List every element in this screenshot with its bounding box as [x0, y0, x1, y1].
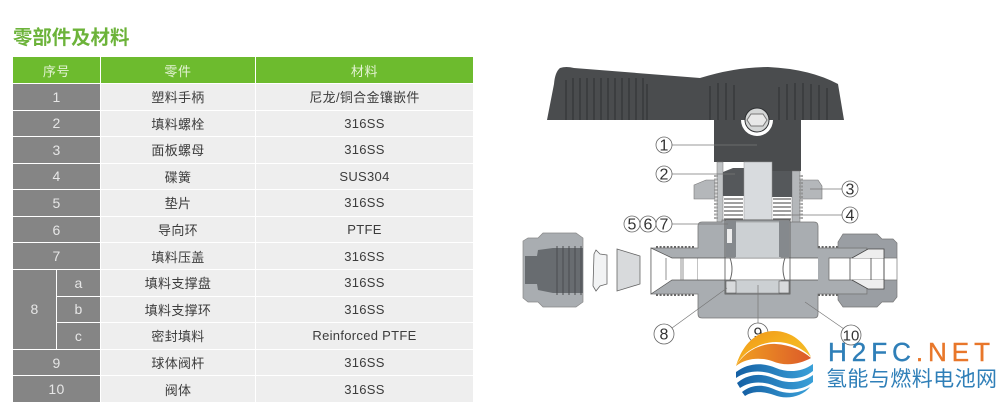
row 8a — [57, 270, 473, 296]
callout leader lines — [672, 145, 844, 329]
row 10: 316SS — [344, 382, 385, 397]
row 8 group number: 8 — [30, 301, 39, 317]
callout 3 — [842, 181, 858, 198]
row 9: 9 — [52, 355, 61, 371]
callout 2 — [656, 166, 672, 184]
row 7: 316SS — [344, 249, 385, 264]
row 8b: b — [74, 301, 83, 317]
front ferrule — [617, 249, 640, 291]
row 1: 塑料手柄 — [151, 90, 205, 105]
row 10: 10 — [48, 381, 65, 397]
callout 6: 6 — [644, 216, 653, 234]
row 3: 3 — [52, 142, 61, 158]
logo text: H2FC.NET: H2FC.NET — [828, 337, 990, 367]
valve body — [651, 220, 867, 318]
row 8c: Reinforced PTFE — [312, 328, 417, 343]
callout 6 — [640, 216, 656, 234]
row 4: SUS304 — [339, 169, 390, 184]
row 8c: 密封填料 — [151, 329, 205, 344]
callout 9 — [748, 323, 768, 343]
row 3 — [13, 137, 473, 163]
table header row: 零件 — [164, 64, 192, 79]
row 8c: c — [75, 328, 82, 344]
row 2: 填料螺栓 — [151, 117, 205, 132]
title: 零部件及材料 — [13, 27, 129, 49]
row 5: 316SS — [344, 195, 385, 210]
row 5: 垫片 — [165, 196, 191, 211]
row 8b — [57, 297, 473, 322]
row 8 group number — [13, 270, 56, 349]
bonnet, nuts and stem — [694, 162, 822, 222]
row 8b: 填料支撑环 — [145, 303, 211, 318]
row 8a: a — [74, 275, 83, 291]
row 8a: 316SS — [344, 275, 385, 290]
callout 1: 1 — [660, 138, 669, 154]
callout 4 — [842, 207, 858, 224]
callout 1 — [656, 137, 672, 154]
row 2 — [13, 111, 473, 136]
callout 5: 5 — [628, 216, 637, 234]
table header row — [13, 57, 473, 83]
row 1 — [13, 84, 473, 110]
callout 7 — [656, 216, 672, 234]
row 8a: 填料支撑盘 — [145, 276, 211, 291]
row 6: PTFE — [347, 222, 382, 237]
callout 3: 3 — [846, 182, 855, 198]
row 9: 球体阀杆 — [151, 356, 205, 371]
table: parts and materials — [13, 57, 473, 402]
row 7 — [13, 243, 473, 269]
row 1: 1 — [52, 89, 61, 105]
row 6 — [13, 217, 473, 242]
row 5: 5 — [52, 195, 61, 211]
row 5 — [13, 190, 473, 216]
row 3: 316SS — [344, 142, 385, 157]
row 1: 尼龙/铜合金镶嵌件 — [309, 90, 420, 105]
row 8b: 316SS — [344, 302, 385, 317]
right compression nut — [829, 234, 897, 307]
left compression nut — [523, 233, 583, 307]
row 8c — [57, 323, 473, 349]
callout 7: 7 — [660, 216, 669, 234]
row 3: 面板螺母 — [151, 143, 205, 158]
callout 2: 2 — [660, 166, 669, 184]
row 4 — [13, 164, 473, 189]
callout 8 — [654, 324, 674, 344]
row 10: 阀体 — [165, 383, 191, 398]
logo icon: sun over waves — [736, 331, 813, 397]
row 4: 碟簧 — [165, 170, 191, 185]
logo text: Chinese site name: 氢能与燃料电池网 — [826, 368, 997, 391]
row 10 — [13, 376, 473, 402]
callout 8: 8 — [660, 326, 669, 344]
table header row: 序号 — [43, 64, 70, 79]
row 9: 316SS — [344, 355, 385, 370]
plastic handle — [547, 67, 844, 171]
callout 5 — [624, 216, 640, 234]
callout 10: 10 — [843, 328, 859, 344]
table header row: 材料 — [351, 64, 378, 79]
row 7: 填料压盖 — [151, 250, 205, 265]
row 2: 316SS — [344, 116, 385, 131]
back ferrule — [593, 250, 607, 291]
row 4: 4 — [52, 168, 61, 184]
callout 9: 9 — [754, 326, 763, 342]
row 7: 7 — [52, 248, 61, 264]
row 6: 导向环 — [158, 223, 198, 238]
row 2: 2 — [52, 115, 61, 131]
row 9 — [13, 350, 473, 375]
callout 4: 4 — [846, 208, 855, 224]
row 6: 6 — [52, 222, 61, 238]
